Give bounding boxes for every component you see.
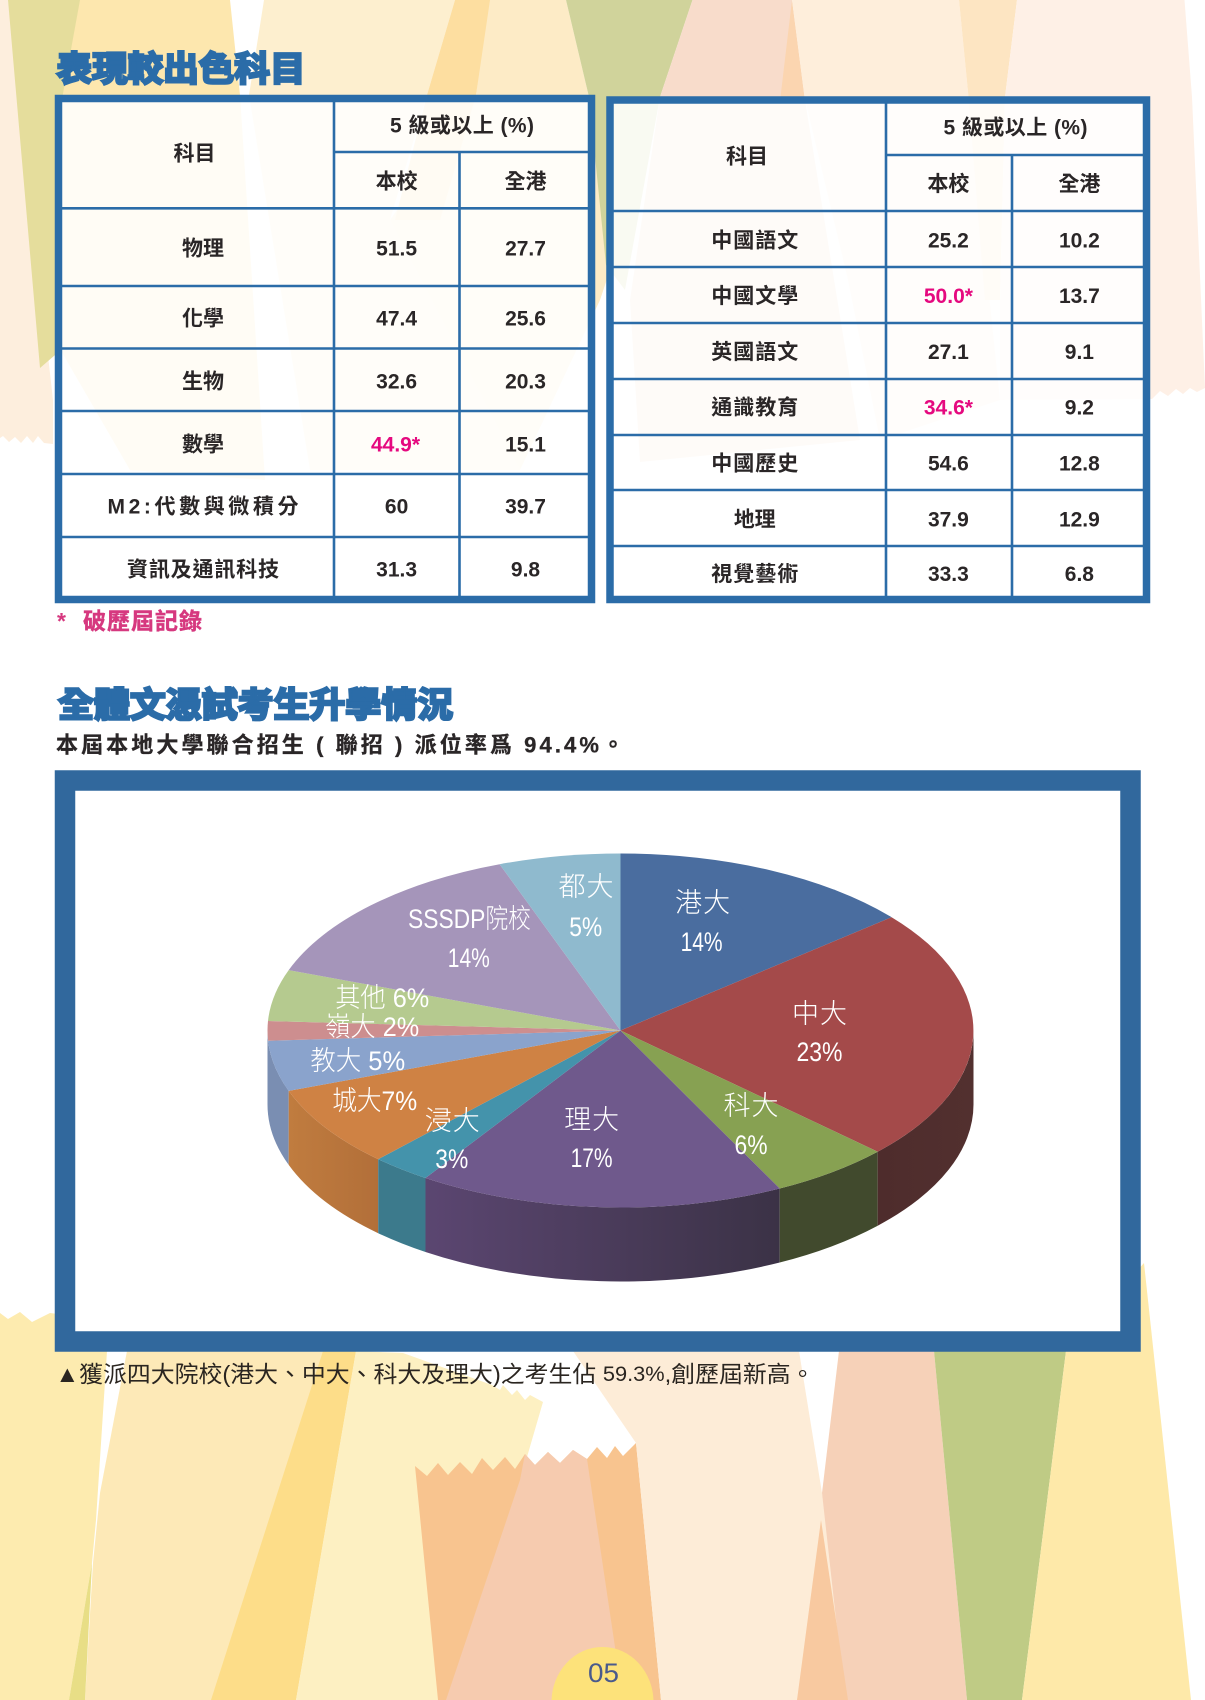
row: 資訊及通訊科技: 資訊及通訊科技 — [127, 558, 279, 582]
pie labels: 3% — [435, 1144, 468, 1174]
row: 中國文學: 50.0* — [924, 285, 974, 308]
row: 數學: 數學 — [182, 434, 224, 456]
row: M2 — [108, 496, 546, 518]
slice: 中大 — [620, 917, 973, 1152]
slice: 其他 — [268, 970, 620, 1030]
pie labels: 中大 — [792, 999, 847, 1029]
row: 中國歷史 — [711, 452, 1100, 476]
row: 中國語文: 25.2 — [928, 230, 969, 252]
row: 化學: 47.4 — [376, 308, 417, 330]
row: 化學: 化學 — [182, 308, 224, 330]
pie side walls — [268, 1030, 974, 1281]
row: 物理: 27.7 — [505, 238, 546, 260]
pie labels: 港大 — [675, 888, 730, 918]
row: 中國歷史: 中國歷史 — [711, 452, 798, 476]
pie labels: 嶺大 2% — [325, 1012, 419, 1042]
row: 數學: 15.1 — [505, 434, 546, 456]
background: bottom paper strips — [0, 1263, 1191, 1700]
row: 生物: 20.3 — [505, 370, 546, 394]
slice: 港大 — [620, 854, 892, 1030]
pie labels: 科大 — [724, 1091, 778, 1121]
row: 化學 — [182, 308, 546, 330]
row: 數學 — [182, 434, 546, 456]
slice: 嶺大 — [268, 1021, 620, 1041]
row: 通識教育: 通識教育 — [711, 396, 798, 420]
row: 中國文學: 中國文學 — [711, 284, 798, 308]
panel: table humanities subjects — [610, 100, 1146, 600]
row: 生物 — [182, 370, 546, 394]
row: 中國歷史: 54.6 — [928, 452, 969, 476]
slice: 浸大 — [378, 1030, 620, 1178]
row: 通識教育 — [711, 396, 1094, 420]
row: 地理: 37.9 — [928, 508, 969, 532]
table header: 全港 — [1058, 173, 1100, 196]
row: 英國語文: 英國語文 — [711, 340, 798, 364]
row: 地理: 12.9 — [1059, 508, 1100, 532]
row: 通識教育: 34.6* — [924, 396, 974, 420]
table header: 5 級或以上 (%) — [390, 114, 534, 138]
row: 生物: 32.6 — [376, 370, 417, 394]
row: 物理: 物理 — [182, 238, 224, 260]
row: 資訊及通訊科技 — [127, 558, 540, 582]
pie labels — [310, 872, 847, 1174]
table header: 5 級或以上 (%) — [944, 116, 1088, 140]
pie labels: 其他 6% — [335, 983, 429, 1013]
row: M2: 60 — [385, 496, 408, 518]
pie labels: 教大 5% — [310, 1046, 405, 1076]
pie labels: 17% — [571, 1143, 613, 1173]
row: 視覺藝術: 33.3 — [928, 563, 969, 586]
row: 視覺藝術: 6.8 — [1065, 563, 1094, 586]
footnote: 破歷屆記錄: * — [57, 608, 66, 634]
table header: 科目 — [726, 146, 768, 168]
row: 中國文學: 13.7 — [1059, 285, 1100, 308]
row: 資訊及通訊科技: 31.3 — [376, 558, 417, 582]
slice: 理大 — [426, 1030, 780, 1207]
page number badge: 05 — [588, 1658, 619, 1688]
row: M2: M2:代數與微積分 — [108, 496, 298, 518]
row: 資訊及通訊科技: 9.8 — [511, 558, 540, 582]
row: 物理 — [182, 238, 546, 260]
slice: 都大 — [500, 854, 620, 1030]
row: 英國語文 — [711, 340, 1094, 364]
table header: 本校 — [927, 172, 969, 196]
row: 視覺藝術 — [711, 563, 1094, 586]
table header: 本校 — [376, 170, 418, 194]
panel: table science subjects — [58, 98, 592, 600]
row: M2: 39.7 — [505, 496, 546, 518]
row: 通識教育: 9.2 — [1065, 396, 1094, 420]
row: 地理: 地理 — [734, 508, 776, 532]
table header — [174, 114, 546, 194]
caption: 四大院校: ▲獲派四大院校(港大、中大、科大及理大)之考生佔 59.3%,創歷屆新高。 — [56, 1361, 814, 1387]
table header: 全港 — [504, 170, 546, 194]
row: 數學: 44.9* — [371, 434, 421, 456]
slice: 教大 — [268, 1030, 620, 1091]
slice: SSSDP院校 — [289, 864, 620, 1030]
table header — [726, 116, 1100, 196]
pie labels: 14% — [681, 927, 723, 957]
row: 化學: 25.6 — [505, 308, 546, 330]
row: 中國歷史: 12.8 — [1059, 452, 1100, 476]
chart: 3D pie of destinations — [268, 854, 974, 1281]
pie labels: 浸大 — [425, 1106, 480, 1136]
slice: 城大 — [289, 1030, 620, 1159]
table header: 科目 — [174, 142, 216, 166]
pie labels: 6% — [734, 1130, 768, 1160]
row: 中國語文 — [711, 228, 1100, 252]
row: 地理 — [734, 508, 1100, 532]
row: 中國文學 — [711, 284, 1100, 308]
row: 生物: 生物 — [182, 370, 224, 394]
pie labels: 5% — [569, 912, 602, 942]
background: top paper strips — [0, 0, 1205, 480]
row: 英國語文: 9.1 — [1065, 341, 1094, 364]
heading: 全體文憑試考生升學情況: 全體文憑試考生升學情況 — [58, 687, 453, 725]
row: 視覺藝術: 視覺藝術 — [711, 563, 798, 586]
pie labels: 14% — [448, 943, 490, 973]
heading: 表現較出色科目: 表現較出色科目 — [56, 51, 306, 89]
footnote: 破歷屆記錄: 破歷屆記錄 — [83, 608, 202, 634]
pie labels: 都大 — [558, 872, 614, 902]
panel: pie chart frame — [65, 780, 1130, 1342]
row: 英國語文: 27.1 — [928, 341, 969, 364]
pie labels: SSSDP院校 — [408, 904, 531, 934]
subheading: 派位率: 本屆本地大學聯合招生 ( 聯招 ) 派位率爲 94.4%。 — [56, 732, 624, 758]
slice: 科大 — [620, 1030, 878, 1188]
row: 中國語文: 10.2 — [1059, 230, 1100, 252]
pie labels: 理大 — [564, 1105, 619, 1135]
pie labels: 城大7% — [332, 1086, 417, 1116]
pie labels: 23% — [796, 1037, 842, 1067]
row: 物理: 51.5 — [376, 238, 417, 260]
row: 中國語文: 中國語文 — [711, 228, 798, 252]
page number badge — [552, 1647, 654, 1700]
